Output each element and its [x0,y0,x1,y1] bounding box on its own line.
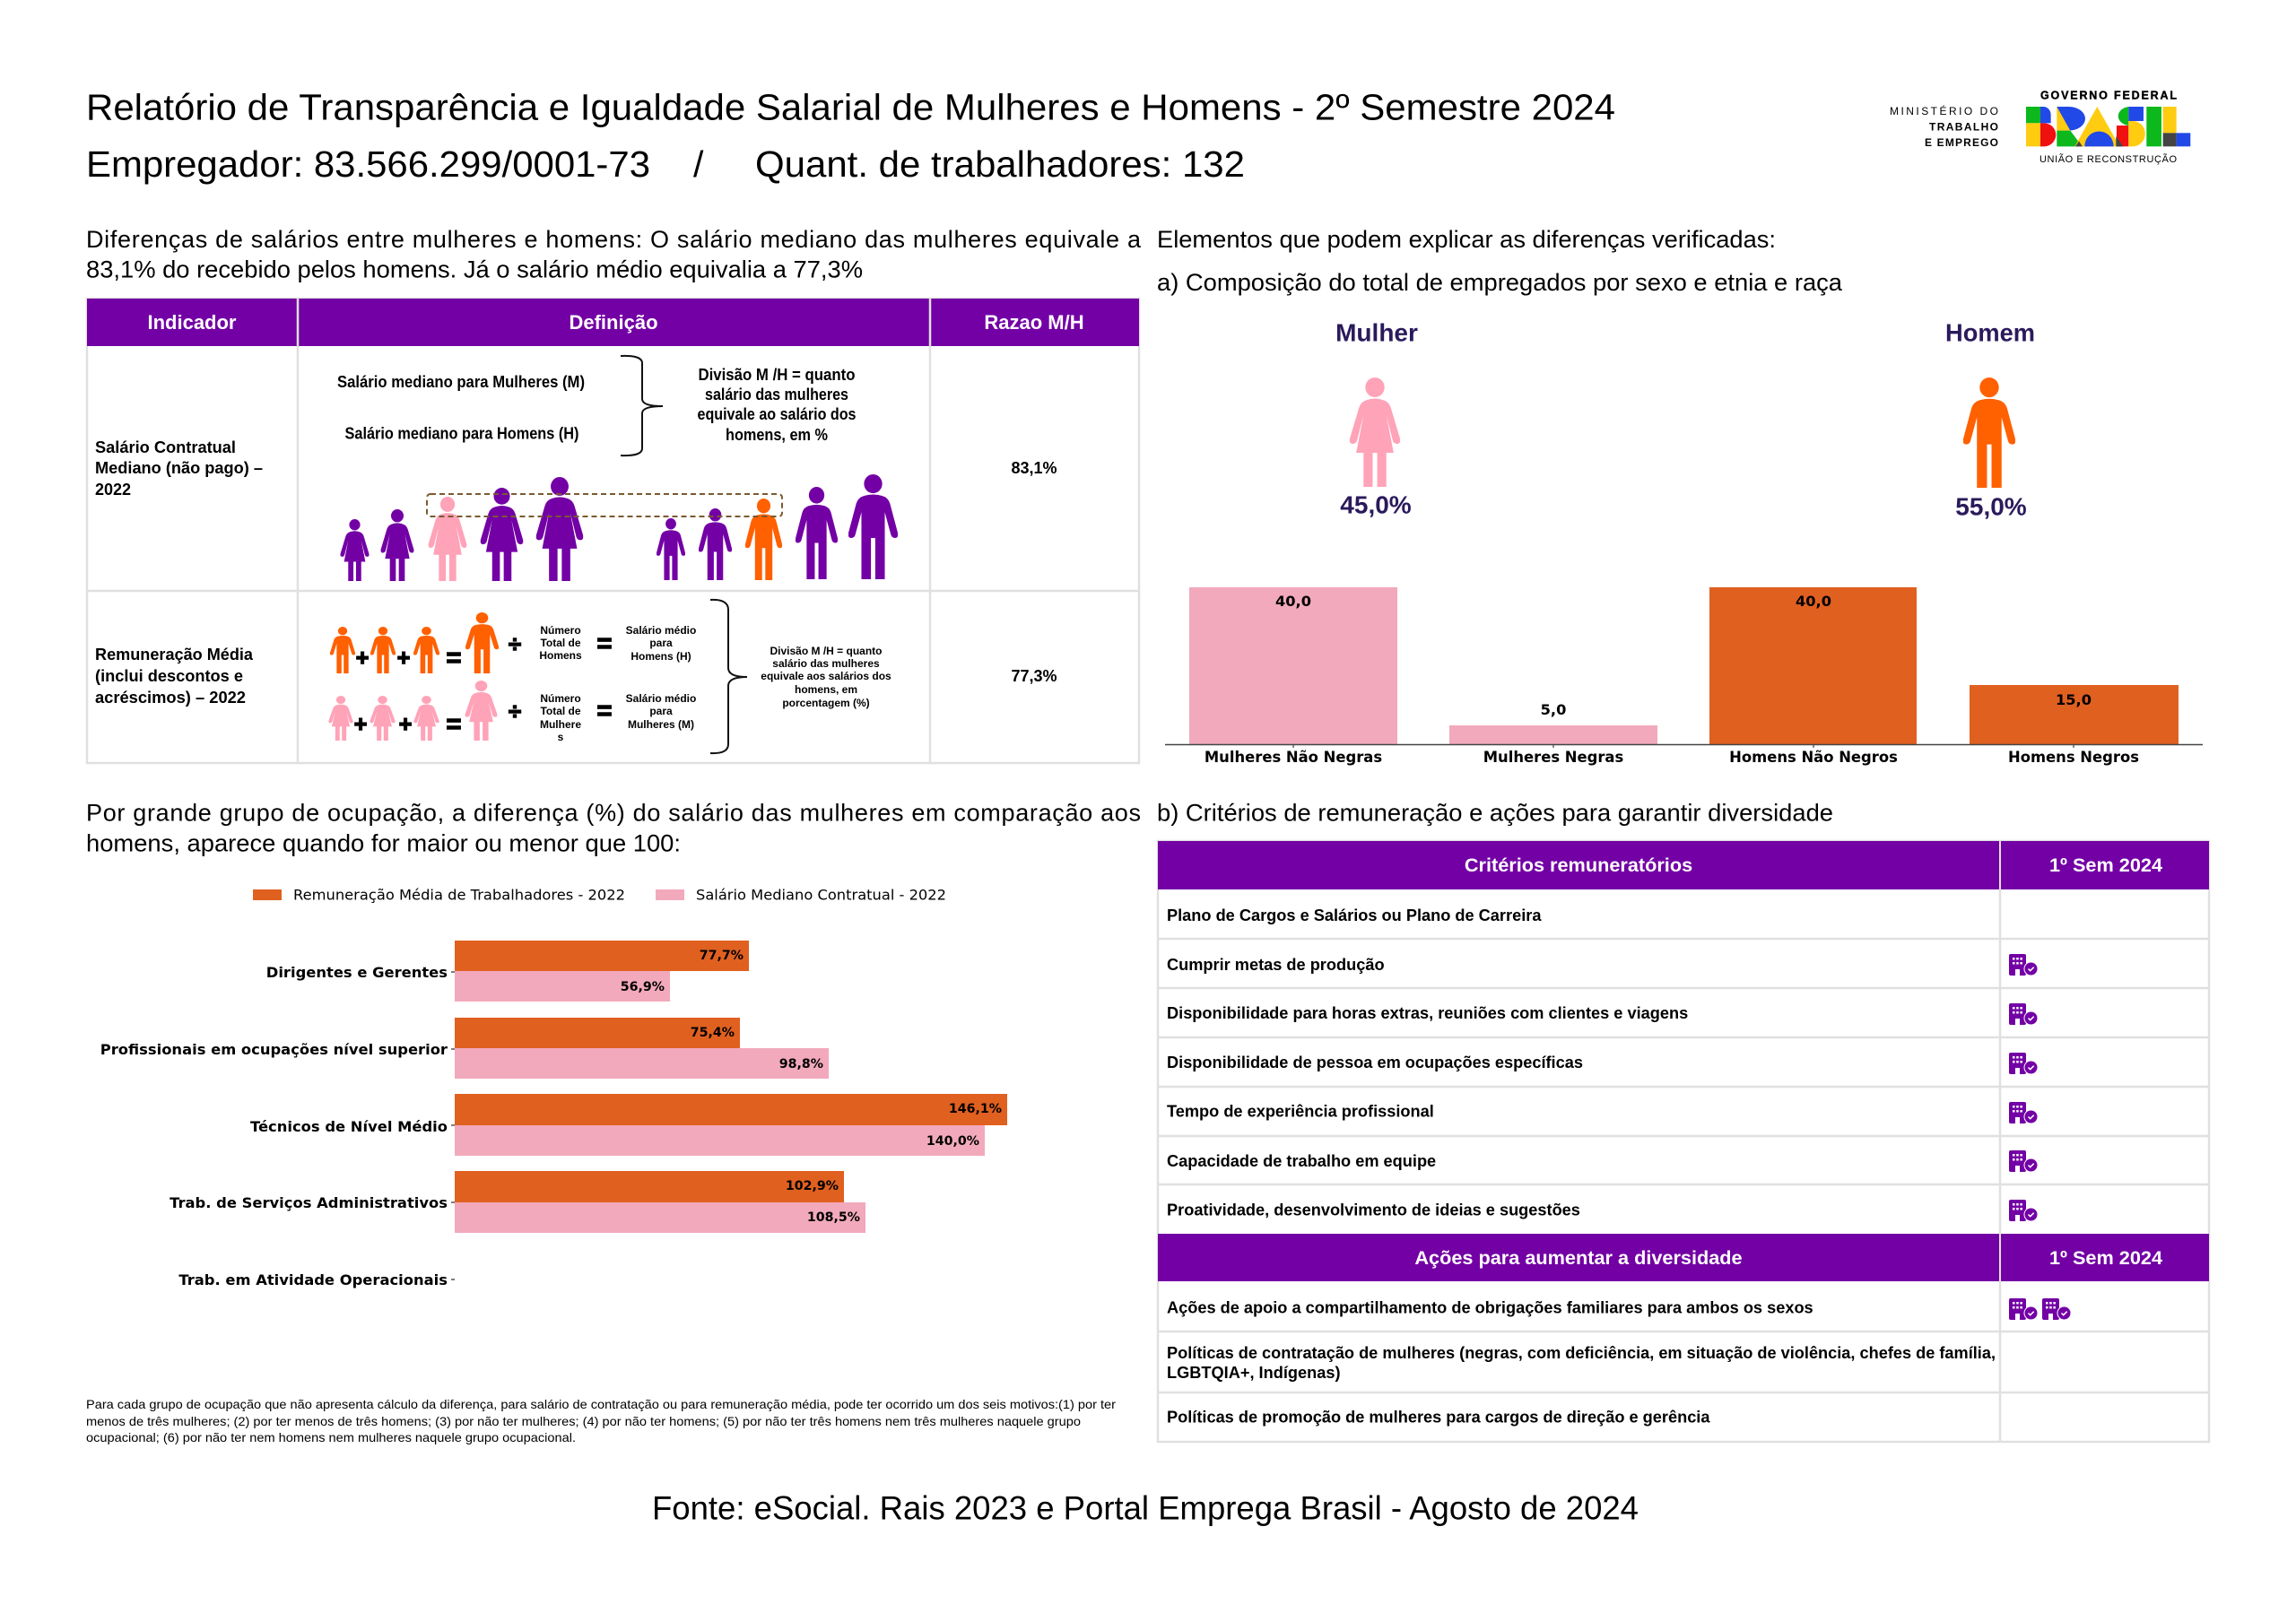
bar values: 75,4% [691,1026,735,1040]
intro text: grande grupo de ocupação [86,800,1141,857]
header: ações para diversidade: 1º Sem 2024 [2049,1246,2162,1269]
definição: fórmula homens: Total de [540,637,581,649]
heading: elementos explicativos: a) Composição do total de empregados por sexo e etnia e raça [1157,269,1843,296]
icon: mulher [1350,377,1400,487]
panel: mulher 45,0% [1335,319,1418,518]
row: políticas de contratação: Políticas de contratação de mulheres (negras, com deficiência, em situação de violência, chefes de família, [1167,1344,1996,1362]
bar values: 98,8% [779,1057,823,1071]
definição: fórmula mulheres: = [447,710,461,739]
title: / [693,143,704,185]
table header: Razao M/H [984,311,1084,334]
bar chart: composição por sexo e raça: Homens Negros [2008,749,2139,766]
definição: salário mediano: equivale ao salário dos [698,405,856,423]
valor: 77,3%: 77,3% [1011,667,1057,685]
definição: fórmula homens: = [447,644,461,672]
label: remuneração média: acréscimos) – 2022 [95,689,246,707]
header: critérios remuneratórios: 1º Sem 2024 [2049,854,2162,876]
bar chart: composição por sexo e raça: Mulheres Negras [1483,749,1623,766]
row: apoio a obrigações familiares [1167,1298,2072,1320]
category labels: Técnicos de Nível Médio [250,1118,448,1135]
title [86,86,1615,185]
definição: salário mediano: Salário mediano para Homens (H) [344,425,579,443]
row: trabalho em equipe [1167,1150,2038,1173]
source: Fonte: eSocial. Rais 2023 e Portal Emprega Brasil - Agosto de 2024 [652,1490,1639,1526]
definição: divisão M/H: salário das mulheres [772,657,880,670]
definição: fórmula mulheres: + [354,712,367,737]
definição: salário mediano [337,356,856,455]
bar values: 140,0% [926,1134,979,1149]
definição: fórmula homens: para [649,637,673,649]
category labels: Profissionais em ocupações nível superior [100,1041,448,1058]
bar values: 102,9% [786,1179,839,1193]
label: remuneração média: (inclui descontos e [95,667,243,685]
bar chart: composição por sexo e raça: 40,0 [1275,593,1311,610]
definição: salário mediano: homens, em % [726,426,828,444]
definição: fórmula mulheres: Salário médio [626,692,696,705]
bar chart: composição por sexo e raça: 40,0 [1796,593,1831,610]
label: salário contratual mediano: 2022 [95,481,131,499]
legend: Salário Mediano Contratual - 2022 [696,886,946,904]
table header: Indicador [147,311,237,334]
bar chart: composição por sexo e raça: 15,0 [2056,691,2092,708]
definição: fórmula mulheres: Mulhere [540,718,581,731]
logo: ministério e governo federal: MINISTÉRIO DO [1890,104,1998,117]
row: experiência profissional: Tempo de experiência profissional [1167,1103,1434,1121]
header: ações para diversidade [1158,1234,2209,1281]
icon: homem [1963,377,2015,488]
row: experiência profissional [1167,1102,2038,1124]
definição: fórmula mulheres: Total de [540,705,581,717]
intro text: diferenças de salários: 83,1% do recebido pelos homens. Já o salário médio equivalia a 77,3% [86,256,863,283]
definição: divisão M/H: equivale aos salários dos [761,670,891,682]
logo: ministério e governo federal: E EMPREGO [1925,136,1998,149]
definição: salário mediano: Salário mediano para Mulheres (M) [337,373,585,391]
definição: fórmula mulheres: s [558,731,564,743]
intro text: grande grupo de ocupação: homens, aparece quando for maior ou menor que 100: [86,830,681,857]
logo: ministério e governo federal: TRABALHO [1929,120,1998,133]
row: horas extras: Disponibilidade para horas extras, reuniões com clientes e viagens [1167,1004,1688,1022]
panel: homem 55,0%: Homem [1945,319,2035,346]
row: metas de produção: Cumprir metas de produção [1167,956,1385,974]
footnote: ocupacional; (6) por não ter nem homens nem mulheres naquele grupo ocupacional. [86,1430,576,1444]
row: metas de produção [1167,954,2038,976]
row: ocupações específicas [1167,1053,2038,1074]
logo: ministério e governo federal [1890,90,2190,165]
valor: 83,1%: 83,1% [1011,459,1057,477]
definição: fórmula mulheres: Número [540,692,581,705]
label: salário contratual mediano [95,438,263,499]
definição: fórmula mulheres: ÷ [509,698,521,724]
label: remuneração média [95,646,254,707]
heading: elementos explicativos: Elementos que podem explicar as diferenças verificadas: [1157,226,1776,253]
title: Relatório de Transparência e Igualdade Salarial de Mulheres e Homens - 2º Semestre 2024 [86,86,1615,127]
label: salário contratual mediano: Mediano (não pago) – [95,459,263,477]
bar chart: diferença por grupo de ocupação [100,886,1007,1288]
legend: Remuneração Média de Trabalhadores - 2022 [293,886,625,904]
definição: fórmula mulheres: + [399,712,412,737]
definição: fórmula homens: = [597,629,612,658]
definição: fórmula mulheres: Mulheres (M) [628,718,694,731]
label: remuneração média: Remuneração Média [95,646,254,664]
definição: fórmula homens [330,612,696,673]
row: políticas de contratação [1167,1344,1996,1382]
definição: fórmula homens: ÷ [509,630,521,657]
row: horas extras [1167,1003,2038,1026]
definição: fórmula mulheres: = [597,697,612,725]
table header: Definição [569,311,658,334]
definição: fórmula homens: Salário médio [626,624,696,637]
panel: mulher 45,0%: Mulher [1335,319,1418,346]
bar values: 77,7% [700,949,744,963]
definição: salário mediano: Divisão M /H = quanto [698,366,856,384]
row: trabalho em equipe: Capacidade de trabalho em equipe [1167,1152,1436,1170]
definição: fórmula homens: + [397,646,410,671]
panel: tabela de indicadores [87,299,1139,763]
definição: divisão M/H [710,600,891,753]
row: políticas de contratação: LGBTQIA+, Indígenas) [1167,1364,1341,1382]
logo: ministério e governo federal: UNIÃO E RECONSTRUÇÃO [2039,153,2177,165]
bar values: 56,9% [621,980,665,994]
definição: fórmula mulheres: para [649,705,673,717]
row: ocupações específicas: Disponibilidade de pessoa em ocupações específicas [1167,1054,1583,1071]
definição: fórmula homens: Número [540,624,581,637]
bar chart: composição por sexo e raça: Homens Não Negros [1729,749,1898,766]
valor: 55,0%: 55,0% [1955,493,2027,520]
row: promoção de mulheres: Políticas de promoção de mulheres para cargos de direção e gerência [1167,1408,1710,1426]
definição: fórmula homens: Homens (H) [631,650,691,663]
category labels: Trab. em Atividade Operacionais [178,1271,448,1288]
bars [455,941,1007,1233]
panel: tabela de critérios [1158,841,2209,1442]
row: apoio a obrigações familiares: Ações de apoio a compartilhamento de obrigações familiares para ambos os sexos [1167,1298,1813,1316]
header: ações para diversidade: Ações para aumentar a diversidade [1414,1246,1743,1269]
bar chart: composição por sexo e raça: 5,0 [1541,701,1566,718]
definição: fórmula homens: + [356,646,369,671]
legend [253,886,946,904]
row: plano de cargos: Plano de Cargos e Salários ou Plano de Carreira [1167,906,1542,924]
definição: fórmula mulheres [328,681,696,743]
row: proatividade: Proatividade, desenvolvimento de ideias e sugestões [1167,1201,1580,1219]
icons: mulheres ordenadas por salário [340,477,583,581]
footnote [86,1397,1116,1444]
bar chart: composição por sexo e raça [1165,587,2203,766]
footnote: Para cada grupo de ocupação que não apresenta cálculo da diferença, para salário de contratação ou para remuneração média, pode ter ocorrido um dos seis motivos:(1) por ter [86,1397,1116,1411]
heading: critérios de remuneração: b) Critérios de remuneração e ações para garantir diversidade [1157,800,1833,827]
category labels: Dirigentes e Gerentes [266,964,448,981]
label: salário contratual mediano: Salário Contratual [95,438,236,456]
bar chart: composição por sexo e raça: Mulheres Não Negras [1205,749,1382,766]
intro text: diferenças de salários: Diferenças de salários entre mulheres e homens: O salário mediano das mulheres equivale a [86,226,1142,253]
header: critérios remuneratórios: Critérios remuneratórios [1465,854,1692,876]
header: critérios remuneratórios [1158,841,2209,889]
heading: elementos explicativos [1157,226,1843,296]
logo: ministério e governo federal: GOVERNO FEDERAL [2040,90,2177,102]
footnote: menos de três mulheres; (2) por ter menos de três homens; (3) por não ter mulheres; (4) por não ter homens; (5) por não ter três homens nem três mulheres naquele grupo [86,1414,1081,1428]
intro text: grande grupo de ocupação: Por grande grupo de ocupação, a diferença (%) do salário das mulheres em comparação aos [86,800,1141,827]
title: Quant. de trabalhadores: 132 [755,143,1245,185]
valor: 45,0%: 45,0% [1340,491,1412,518]
definição: divisão M/H: porcentagem (%) [782,697,870,709]
definição: fórmula homens: Homens [539,649,582,662]
panel: homem 55,0% [1945,319,2035,520]
definição: divisão M/H: Divisão M /H = quanto [770,645,883,657]
bar values: 108,5% [807,1210,860,1225]
bar values: 146,1% [949,1102,1002,1116]
table header [87,299,1139,346]
intro text: diferenças de salários [86,226,1142,283]
category labels [100,964,455,1288]
category labels: Trab. de Serviços Administrativos [170,1194,448,1211]
icons: homens ordenados por salário [657,474,898,580]
bar values [621,949,1002,1225]
definição: salário mediano: salário das mulheres [705,386,848,403]
row: proatividade [1167,1200,2038,1221]
title: Empregador: 83.566.299/0001-73 [86,143,650,185]
definição: divisão M/H: homens, em [795,683,857,696]
dashed box: medianas [427,494,782,516]
